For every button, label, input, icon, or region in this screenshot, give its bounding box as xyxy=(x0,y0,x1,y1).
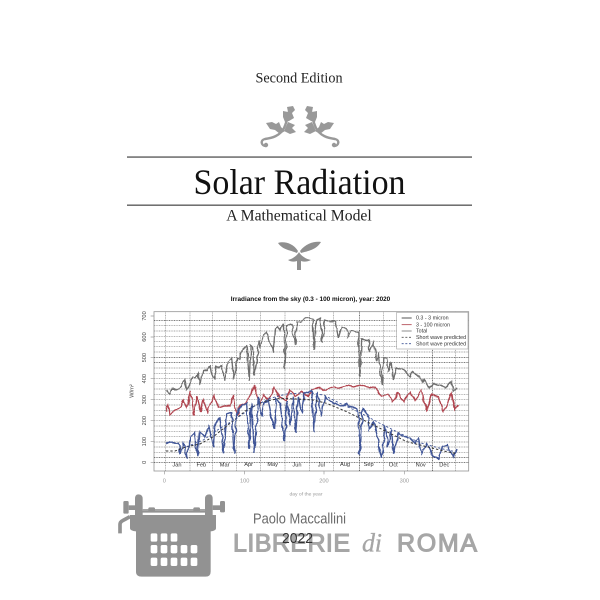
month labels: Oct xyxy=(389,463,398,469)
y axis labels: 700 xyxy=(142,311,148,321)
icon: lower leaf ornament xyxy=(278,242,321,270)
month labels: Jan xyxy=(172,463,182,469)
y axis labels: W/m² xyxy=(129,384,135,398)
icon: typewriter logo xyxy=(120,494,225,577)
series: total xyxy=(167,317,457,394)
month labels: Jun xyxy=(292,463,302,469)
series: 0.3-3 micron xyxy=(166,390,456,458)
icon: top floral ornament xyxy=(262,106,338,147)
legend: Total xyxy=(416,329,427,335)
y axis labels: 600 xyxy=(142,332,148,342)
month labels xyxy=(172,462,450,469)
series: 3-100 micron xyxy=(166,385,457,415)
month labels: Apr xyxy=(244,462,253,468)
month labels: Jul xyxy=(318,463,325,469)
subtitle: A Mathematical Model xyxy=(226,208,372,224)
legend: 0.3 - 3 micron xyxy=(416,316,449,322)
plot area xyxy=(129,311,469,497)
year: 2022 xyxy=(282,531,313,547)
legend: Short wave predicted xyxy=(416,335,466,341)
series: short wave predicted xyxy=(166,398,455,453)
watermark: Librerie di Roma: di xyxy=(362,528,382,558)
x axis labels xyxy=(163,479,409,497)
month labels: Sep xyxy=(364,462,374,468)
y axis ticks xyxy=(151,316,404,474)
x axis labels: 200 xyxy=(319,479,329,485)
chart title: Irradiance from the sky (0.3 - 100 micron), year: 2020 xyxy=(231,296,391,303)
bottom rule xyxy=(127,205,472,206)
x axis labels: day of the year xyxy=(290,491,323,497)
month labels: Mar xyxy=(220,463,230,469)
y axis labels: 500 xyxy=(142,353,148,362)
x axis labels: 100 xyxy=(240,479,249,485)
watermark: Librerie di Roma: LIBRERIE xyxy=(233,530,350,558)
legend xyxy=(397,312,468,349)
y axis labels xyxy=(129,311,148,464)
month labels: Aug xyxy=(340,462,350,468)
x axis labels: 0 xyxy=(163,479,166,485)
month labels: May xyxy=(267,462,278,468)
watermark: Librerie di Roma xyxy=(233,528,477,558)
edition label: Second Edition xyxy=(255,70,343,86)
month labels: Feb xyxy=(196,463,206,469)
y axis labels: 300 xyxy=(142,395,148,404)
top rule xyxy=(127,156,472,158)
y axis labels: 200 xyxy=(142,416,148,425)
y axis labels: 100 xyxy=(142,437,148,446)
author: Paolo Maccallini xyxy=(253,512,346,528)
legend: 3 - 100 micron xyxy=(416,322,450,328)
chart: irradiance from the sky xyxy=(129,296,469,497)
month labels: Dec xyxy=(439,463,450,469)
y axis labels: 400 xyxy=(142,374,148,383)
title: Solar Radiation xyxy=(194,162,406,202)
y axis labels: 0 xyxy=(142,461,148,464)
watermark: Librerie di Roma: ROMA xyxy=(397,530,477,558)
legend: Short wave predicted xyxy=(416,341,466,347)
x axis labels: 300 xyxy=(400,479,409,485)
month labels: Nov xyxy=(416,463,426,469)
